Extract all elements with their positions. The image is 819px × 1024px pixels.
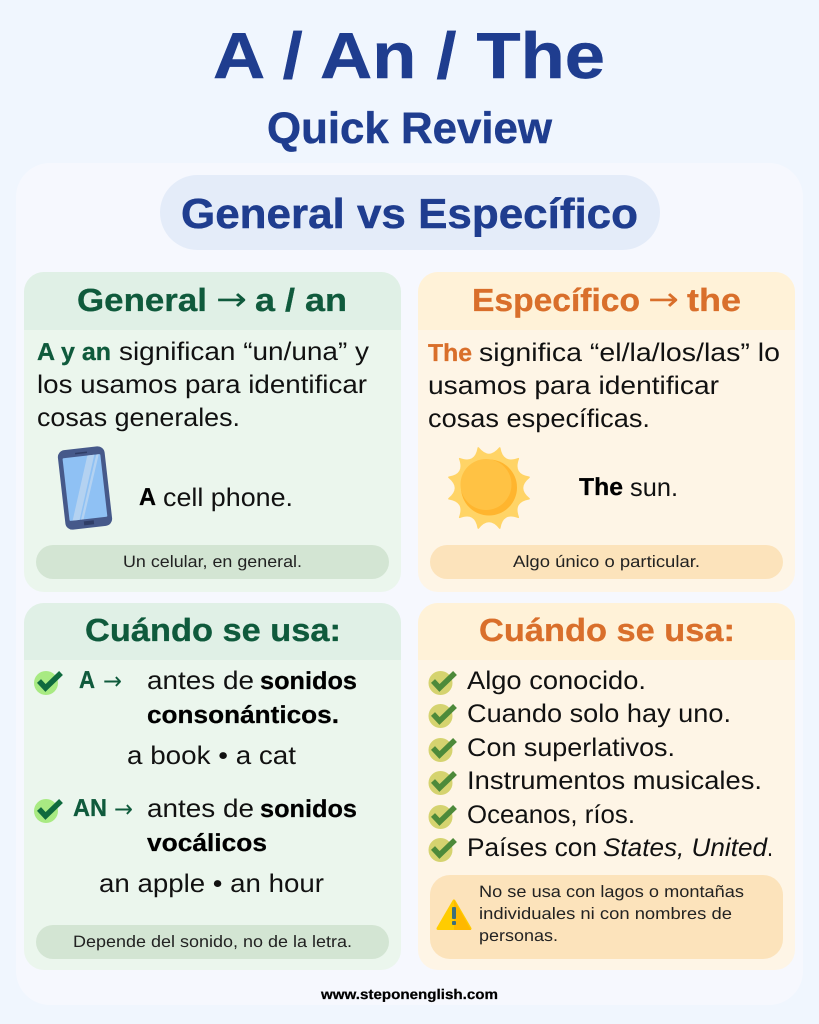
item: países: States, United bbox=[603, 834, 768, 862]
text block: the explanation: cosas específicas. bbox=[428, 405, 650, 433]
rule: a before consonants: consonánticos. bbox=[147, 702, 339, 729]
rule: a before consonants: a book • a cat bbox=[127, 742, 296, 770]
example: the sun bbox=[579, 474, 678, 502]
text block: a y an explanation: cosas generales. bbox=[37, 404, 240, 432]
rule: an before vowels: vocálicos bbox=[147, 830, 267, 857]
panel: cuándo se usa the bbox=[418, 603, 795, 970]
text block: the explanation: usamos para identificar bbox=[428, 372, 720, 400]
text block: a y an explanation: significan “un/una” y bbox=[119, 338, 369, 366]
card header: cuándo se usa bbox=[24, 603, 401, 660]
rule: an before vowels: antes de bbox=[147, 795, 254, 823]
example: a cell phone: cell phone. bbox=[163, 484, 293, 512]
note pill: depende del sonido bbox=[36, 925, 389, 959]
text block: a y an explanation: los usamos para identificar bbox=[37, 371, 368, 399]
card header: específico: the bbox=[687, 282, 741, 318]
icon: check bbox=[34, 671, 61, 695]
panel: general a/an bbox=[24, 272, 401, 592]
example: a cell phone: A bbox=[139, 484, 156, 511]
item: instrumentos musicales: Instrumentos musicales. bbox=[467, 767, 762, 795]
item: con superlativos: Con superlativos. bbox=[467, 734, 675, 762]
main panel bbox=[16, 163, 803, 1005]
note pill: un celular: Un celular, en general. bbox=[123, 553, 302, 571]
callout: warning note: individuales ni con nombres de bbox=[479, 905, 732, 923]
card header: general: General bbox=[77, 282, 207, 318]
item: algo conocido: Algo conocido. bbox=[467, 667, 646, 695]
note pill: algo único bbox=[430, 545, 783, 579]
rule: a before consonants: sonidos bbox=[260, 668, 357, 695]
panel: específico the bbox=[418, 272, 795, 592]
card header: cuándo se usa bbox=[418, 603, 795, 660]
card header: cuándo se usa: Cuándo se usa: bbox=[479, 612, 735, 648]
note pill: un celular bbox=[36, 545, 389, 579]
card header: específico: Específico bbox=[472, 282, 640, 318]
callout: warning note: No se usa con lagos o montañas bbox=[479, 883, 744, 901]
title: A / An / The bbox=[213, 19, 605, 92]
text block: a y an explanation bbox=[37, 338, 369, 432]
icon: cell phone bbox=[57, 446, 113, 530]
note pill: algo único: Algo único o particular. bbox=[513, 553, 700, 571]
text block: a y an explanation: A y an bbox=[37, 339, 111, 366]
card header: general: a / an bbox=[255, 282, 347, 318]
card header: específico bbox=[418, 272, 795, 330]
item: países bbox=[428, 834, 773, 862]
text block: the explanation: The bbox=[428, 340, 472, 367]
item: cuando solo hay uno: Cuando solo hay uno. bbox=[467, 700, 731, 728]
example: the sun: The bbox=[579, 474, 623, 501]
rule: an before vowels: sonidos bbox=[260, 796, 357, 823]
rule: an before vowels bbox=[34, 795, 357, 898]
rule: an before vowels: an apple • an hour bbox=[99, 870, 325, 898]
card header: específico: → bbox=[648, 280, 679, 318]
heading pill: General vs Específico: General vs Específico bbox=[181, 190, 638, 237]
card header: general bbox=[24, 272, 401, 330]
panel: cuándo se usa a/an bbox=[24, 603, 401, 970]
rule: an before vowels: AN bbox=[73, 795, 107, 822]
rule: a before consonants: → bbox=[103, 667, 122, 695]
item: países: . bbox=[767, 834, 773, 862]
note pill: depende del sonido: Depende del sonido, no de la letra. bbox=[73, 933, 352, 951]
heading pill: General vs Específico bbox=[160, 175, 660, 250]
card header: general: → bbox=[216, 280, 247, 318]
icon: check bbox=[34, 799, 61, 823]
item: oceanos, ríos: Oceanos, ríos. bbox=[467, 801, 635, 829]
checklist bbox=[428, 667, 773, 862]
icon: sun bbox=[449, 448, 529, 528]
callout: warning note: personas. bbox=[479, 927, 558, 945]
text block: the explanation bbox=[428, 339, 780, 433]
footer url: www.steponenglish.com bbox=[320, 986, 498, 1002]
rule: a before consonants bbox=[34, 667, 357, 770]
callout: warning note bbox=[430, 875, 783, 959]
rule: a before consonants: antes de bbox=[147, 667, 254, 695]
text block: the explanation: significa “el/la/los/las” lo bbox=[479, 339, 780, 367]
card header: cuándo se usa: Cuándo se usa: bbox=[85, 612, 341, 648]
rule: a before consonants: A bbox=[79, 667, 95, 694]
example: the sun: sun. bbox=[630, 474, 678, 502]
subtitle: Quick Review bbox=[267, 104, 553, 153]
icon: warning triangle bbox=[438, 900, 471, 930]
item: países: Países con bbox=[467, 834, 597, 862]
rule: an before vowels: → bbox=[114, 795, 133, 823]
